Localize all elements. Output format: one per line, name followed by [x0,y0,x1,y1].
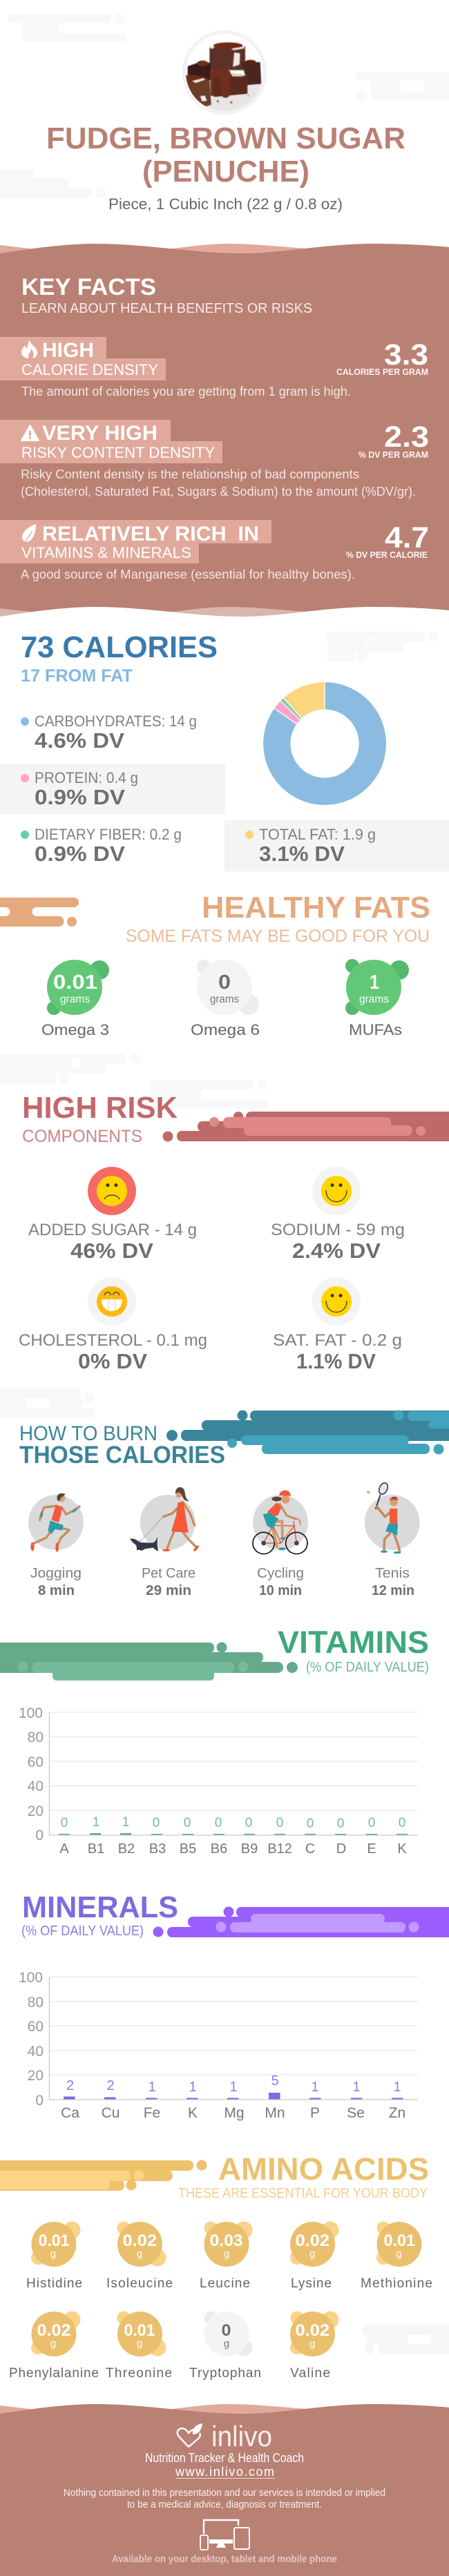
bar chart: vitamins: 0 [337,1817,344,1831]
fact: risky content density: % DV PER GRAM [359,449,428,460]
fact: risky content density [0,420,429,498]
burn heading: HOW TO BURN [19,1422,157,1445]
bar chart: vitamins: 0 [61,1816,68,1830]
bar chart: vitamins: B2 [118,1841,135,1857]
risk item: saturated fat: SAT. FAT - 0.2 g [273,1331,402,1350]
fat: MUFAs [345,959,409,1038]
risk item: saturated fat [273,1277,402,1373]
calories heading: 73 CALORIES [21,630,218,664]
amino: threonine: g [137,2338,142,2350]
activity: cycling: Cycling [257,1566,304,1581]
fact: risky content density: 2.3 [384,420,429,454]
activity: tennis: 12 min [372,1583,414,1598]
bar chart: vitamins: B3 [149,1841,166,1857]
macro: carbohydrates: 4.6% DV [35,728,124,753]
panel: footer [0,2404,449,2576]
activity: cycling [253,1490,308,1598]
amino: phenylalanine [9,2312,99,2381]
panel: header [48,30,405,213]
icon: cyclist [253,1490,308,1554]
fat: omega 6: Omega 6 [191,1021,260,1038]
amino: valine [290,2312,338,2381]
amino: histidine: g [50,2248,56,2260]
bar chart: vitamins: 0 [245,1816,252,1830]
fact: calorie density: CALORIES PER GRAM [336,367,428,377]
activity: pet care: 29 min [146,1583,191,1598]
fact: rich in vitamins: VITAMINS & MINERALS [21,544,191,561]
minerals heading: MINERALS [22,1890,178,1924]
activity: pet care [130,1487,200,1598]
healthy fats heading: SOME FATS MAY BE GOOD FOR YOU [126,927,430,946]
bar chart: minerals: 1 [148,2080,156,2095]
donut chart [263,682,387,805]
bar chart: vitamins: 60 [28,1754,44,1770]
bar chart: vitamins: 100 [19,1705,43,1721]
bar chart: minerals [19,1970,418,2121]
macro: carbohydrates: CARBOHYDRATES: 14 g [35,713,197,730]
calories heading: 17 FROM FAT [21,666,133,686]
fact: rich in vitamins: A good source of Manganese (essential for healthy bones). [21,568,355,581]
fat: omega 6: 0 [218,971,231,994]
bar chart: vitamins: 0 [184,1816,191,1830]
bar chart: vitamins: 1 [122,1815,129,1830]
high risk heading: COMPONENTS [22,1127,142,1146]
amino: lysine: Lysine [291,2276,332,2291]
bar chart: minerals: Ca [61,2105,79,2121]
healthy fats heading [126,891,430,946]
bar chart: vitamins: B12 [267,1841,292,1857]
macro: carbohydrates [21,713,197,753]
panel: healthy fats [0,891,430,1038]
bar chart: minerals: Zn [389,2105,405,2121]
amino: phenylalanine: Phenylalanine [9,2366,99,2381]
bar chart: vitamins: A [59,1841,69,1857]
amino: threonine: 0.01 [124,2321,155,2340]
bar chart: minerals: Se [347,2105,365,2121]
panel: amino acids [0,2151,449,2381]
icon: woman walking dog [130,1487,200,1552]
panel: how to burn [0,1388,449,1598]
activity: jogging: Jogging [30,1566,82,1581]
amino: histidine [26,2222,82,2291]
vitamins heading [278,1625,429,1675]
macro: protein: PROTEIN: 0.4 g [35,769,138,786]
logo: inlivo: inlivo [211,2420,272,2452]
risk item: sodium [271,1167,405,1263]
activity: pet care: Pet Care [142,1566,195,1581]
amino: lysine [290,2222,338,2291]
macro: dietary fiber: 0.9% DV [35,842,125,866]
amino: isoleucine: g [137,2248,142,2260]
decorative blob: green [0,1642,298,1681]
macro: protein: 0.9% DV [35,785,125,809]
bar chart: vitamins: B1 [88,1841,104,1857]
amino: histidine: 0.01 [39,2231,69,2250]
risk item: added sugar: ADDED SUGAR - 14 g [28,1221,197,1239]
fact: calorie density: CALORIE DENSITY [21,361,158,378]
high risk heading [22,1091,178,1146]
macro: protein [21,769,138,809]
amino: tryptophan: Tryptophan [189,2366,261,2381]
risk item: sodium: 2.4% DV [292,1239,381,1263]
fact: calorie density [0,337,428,398]
bar chart: vitamins: 0 [215,1816,222,1830]
bar chart: vitamins: K [397,1841,407,1857]
fat: omega 6: grams [210,994,239,1005]
fact: risky content density: VERY HIGH [42,422,157,445]
icon: sad face [88,1167,136,1215]
amino acids heading: AMINO ACIDS [218,2151,429,2187]
macro: total fat: TOTAL FAT: 1.9 g [259,826,376,843]
panel: vitamins [0,1625,429,1857]
decorative blob: purple [153,1907,449,1937]
bar chart: minerals: K [188,2105,198,2121]
serving size: Piece, 1 Cubic Inch (22 g / 0.8 oz) [108,195,343,213]
bar chart: minerals: 20 [28,2068,44,2084]
risk item: cholesterol: 0% DV [78,1349,147,1373]
panel: key facts [0,244,449,625]
icon: leaf [22,524,36,542]
title: FUDGE, BROWN SUGAR [46,122,405,155]
bar chart: minerals: 40 [28,2044,44,2060]
bar chart: minerals: 1 [311,2080,319,2095]
burn heading: THOSE CALORIES [19,1442,225,1469]
amino acids heading: THESE ARE ESSENTIAL FOR YOUR BODY [178,2186,428,2201]
bar chart: vitamins: 0 [276,1816,283,1830]
fat: omega 6 [191,960,260,1038]
icon: devices [200,2520,249,2550]
fact: risky content density: RISKY CONTENT DENSITY [21,444,215,461]
amino: isoleucine: 0.02 [123,2231,157,2250]
vitamins heading: (% OF DAILY VALUE) [306,1660,429,1675]
healthy fats heading: HEALTHY FATS [202,891,430,924]
bar chart: vitamins: B6 [211,1841,227,1857]
decorative blob: orange [0,898,79,927]
key facts heading [21,274,312,316]
icon: jogger [28,1493,84,1552]
icon: tennis player [365,1482,420,1553]
bar chart: minerals: 5 [271,2073,279,2089]
fact: calorie density: HIGH [42,339,94,362]
availability note: Available on your desktop, tablet and mobile phone [112,2553,337,2565]
bar chart: vitamins: D [336,1841,346,1857]
icon: warning [21,425,39,440]
amino: phenylalanine: 0.02 [37,2321,70,2340]
bar chart: minerals: Mn [265,2105,285,2121]
fact: rich in vitamins: 4.7 [385,521,429,554]
amino: leucine: g [224,2248,229,2260]
panel: calories [0,630,449,871]
bar chart: minerals: Mg [224,2105,245,2121]
fact: risky content density: (Cholesterol, Saturated Fat, Sugars & Sodium) to the amount (%DV/gr). [21,485,416,498]
bar chart: minerals: P [310,2105,320,2121]
bar chart: vitamins: 20 [28,1803,44,1819]
amino: valine: Valine [290,2366,330,2381]
activity: tennis [365,1482,420,1598]
bar chart: vitamins: 40 [28,1779,44,1794]
bar chart: vitamins: 0 [35,1828,44,1843]
fact: rich in vitamins: RELATIVELY RICH IN [42,523,259,545]
vitamins heading: VITAMINS [278,1625,429,1660]
macro: dietary fiber [21,826,182,866]
bar chart: vitamins: C [305,1841,315,1857]
fact: risky content density: Risky Content density is the relationship of bad components [21,467,359,481]
amino: threonine [106,2312,172,2381]
bar chart: minerals: 100 [19,1970,43,1986]
amino: methionine [361,2222,432,2291]
fat: omega 3: 0.01 [53,971,97,994]
bar chart: vitamins: E [367,1841,376,1857]
website link: www.inlivo.com [175,2465,274,2479]
fact: calorie density: The amount of calories you are getting from 1 gram is high. [21,385,351,398]
amino: threonine: Threonine [106,2366,172,2381]
amino: leucine: 0.03 [210,2231,243,2250]
disclaimer: to be a medical advice, diagnosis or treatment. [127,2499,322,2510]
risk item: cholesterol [19,1277,207,1373]
key facts heading: KEY FACTS [21,274,156,300]
risk item: added sugar: 46% DV [70,1239,153,1263]
bar chart: minerals: 2 [66,2078,74,2093]
activity: jogging: 8 min [38,1583,75,1598]
calories heading [21,630,218,686]
decorative blob: teal [166,1410,449,1454]
bar chart: minerals: 60 [28,2019,44,2035]
bar chart: minerals: 80 [28,1995,44,2011]
bar chart: vitamins [19,1705,418,1857]
disclaimer [64,2487,385,2510]
bar chart: minerals: Fe [144,2105,160,2121]
high risk heading: HIGH RISK [22,1091,178,1125]
amino: valine: 0.02 [296,2321,329,2340]
activity: tennis: Tenis [375,1566,410,1581]
activity: cycling: 10 min [259,1583,302,1598]
decorative blob: yellow [0,2160,207,2191]
icon: flame [21,340,37,358]
logo: inlivo [178,2420,272,2452]
risk item: saturated fat: 1.1% DV [296,1349,376,1373]
icon: smile face [312,1167,361,1215]
panel: high risk [0,1054,449,1373]
bar chart: minerals: 1 [229,2080,238,2095]
bar chart: minerals: Cu [102,2105,120,2121]
fact: rich in vitamins [0,520,429,581]
bar chart: vitamins: 1 [93,1815,99,1830]
amino: methionine: g [396,2248,402,2260]
amino: tryptophan [189,2312,261,2381]
bar chart: vitamins: 0 [153,1816,160,1830]
decorative blob: red [163,1112,449,1142]
amino: methionine: 0.01 [384,2231,415,2250]
fact: rich in vitamins: % DV PER CALORIE [346,550,428,560]
amino: methionine: Methionine [361,2276,432,2291]
fat: MUFAs: MUFAs [349,1021,402,1038]
bar chart: minerals: 2 [106,2078,115,2093]
amino: leucine: Leucine [200,2276,250,2291]
bar chart: vitamins: 0 [307,1817,314,1831]
fat: MUFAs: 1 [370,971,379,994]
bar chart: minerals: 1 [189,2080,197,2095]
disclaimer: Nothing contained in this presentation and our services is intended or implied [64,2487,385,2499]
fat: MUFAs: grams [359,994,389,1005]
amino: lysine: 0.02 [296,2231,329,2250]
fact: calorie density: 3.3 [384,338,428,371]
amino: phenylalanine: g [50,2338,56,2350]
title: (PENUCHE) [142,155,309,188]
key facts heading: LEARN ABOUT HEALTH BENEFITS OR RISKS [21,301,312,316]
minerals heading: (% OF DAILY VALUE) [21,1924,144,1939]
risk item: added sugar [28,1167,197,1263]
fat: omega 3: grams [60,994,90,1005]
amino: valine: g [309,2338,315,2350]
bar chart: vitamins: B5 [180,1841,196,1857]
amino: isoleucine [106,2222,173,2291]
icon: grin face [88,1277,136,1326]
amino: histidine: Histidine [26,2276,82,2291]
bar chart: vitamins: 80 [28,1730,44,1745]
bar chart: minerals: 1 [352,2080,361,2095]
food photo [182,32,267,119]
bar chart: minerals: 1 [393,2080,401,2095]
panel: minerals [19,1890,449,2121]
title [46,122,405,188]
macro: total fat: 3.1% DV [259,842,345,866]
fat: omega 3: Omega 3 [41,1021,109,1038]
amino: tryptophan: g [224,2338,229,2350]
amino: tryptophan: 0 [221,2321,231,2340]
bar chart: vitamins: B9 [241,1841,258,1857]
burn heading [19,1422,225,1469]
amino: leucine [200,2222,253,2291]
activity: jogging [28,1493,84,1598]
amino acids heading [178,2151,429,2201]
macro: total fat [245,826,376,866]
macro: dietary fiber: DIETARY FIBER: 0.2 g [35,826,182,843]
tagline: Nutrition Tracker & Health Coach [145,2451,304,2465]
risk item: sodium: SODIUM - 59 mg [271,1221,405,1239]
fat: omega 3 [41,960,109,1038]
bar chart: minerals: 0 [35,2093,44,2109]
minerals heading [21,1890,178,1939]
amino: isoleucine: Isoleucine [106,2276,173,2291]
bar chart: vitamins: 0 [399,1816,405,1830]
amino: lysine: g [309,2248,315,2260]
bar chart: vitamins: 0 [368,1816,375,1830]
risk item: cholesterol: CHOLESTEROL - 0.1 mg [19,1331,207,1350]
icon: smile face [312,1277,361,1326]
